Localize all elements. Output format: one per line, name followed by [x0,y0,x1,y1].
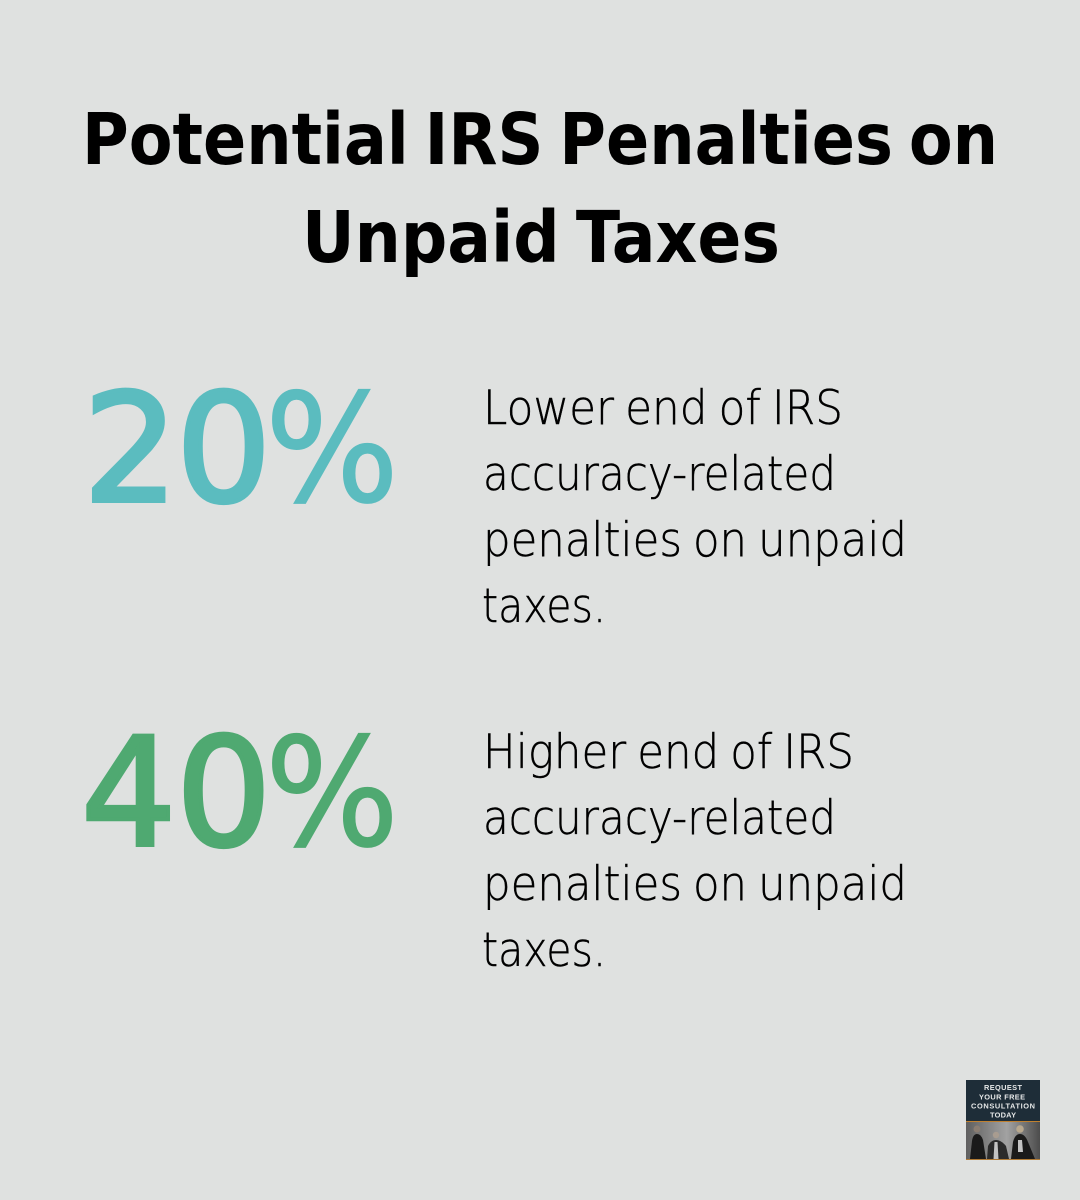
statistic: 20%: % [265,363,399,537]
text block: 40% description: penalties on unpaid [483,857,907,912]
title: Unpaid Taxes [302,196,780,279]
statistic: 40% [81,707,399,881]
text block: 40% description: taxes. [482,923,606,978]
statistic: 40%: 4 [81,707,176,881]
badge: request your free consultation: REQUEST [984,1083,1022,1092]
badge: request your free consultation: YOUR FREE [979,1092,1025,1101]
text block: 40% description: accuracy-related [483,791,836,846]
statistic: 20%: 2 [83,363,178,537]
text block: 20% description: accuracy-related [483,447,836,502]
text block: 20% description: taxes. [482,579,606,634]
statistic: 40%: 0 [176,707,271,881]
text block: 40% description [482,725,907,978]
text block: 20% description: Lower end of IRS [483,381,843,436]
text block: 20% description: penalties on unpaid [483,513,907,568]
badge: request your free consultation [966,1080,1040,1160]
statistic: 20% [83,363,399,537]
statistic: 20%: 0 [176,363,271,537]
text block: 40% description: Higher end of IRS [483,725,854,780]
badge: request your free consultation: TODAY [990,1110,1016,1119]
title: Potential IRS Penalties on [82,98,998,181]
badge: request your free consultation: CONSULTATION [971,1101,1035,1110]
statistic: 40%: % [265,707,399,881]
title [82,98,998,279]
photo: three people [970,1125,1035,1159]
text block: 20% description [482,381,907,634]
